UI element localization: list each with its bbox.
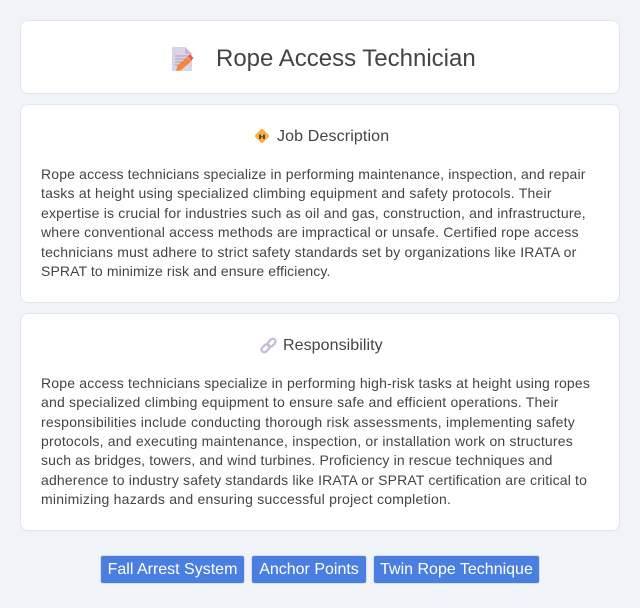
panel: responsibility	[20, 313, 620, 531]
text: job description: Rope access technicians specialize in performing maintenance, inspection, and repair	[41, 166, 586, 182]
icon: chain link	[260, 338, 277, 354]
text: responsibility: protocols, and executing maintenance, inspection, or installation work on structures	[41, 433, 573, 449]
text: job description: technicians must adhere to strict safety standards set by organizations like IRATA or	[41, 244, 576, 260]
heading: job description: Job Description	[277, 128, 389, 145]
heading: responsibility: Responsibility	[283, 337, 383, 354]
text: responsibility: responsibilities include conducting thorough risk assessments, implementing safety	[41, 414, 575, 430]
panel: job description	[20, 104, 620, 303]
text: responsibility: minimizing hazards and ensuring successful project completion.	[41, 491, 451, 507]
tag: twin rope technique	[373, 555, 540, 584]
text: job description: tasks at height using specialized climbing equipment and safety protocols. Their	[41, 185, 552, 201]
icon: document with pencil	[172, 47, 194, 71]
tag: fall arrest system	[100, 555, 245, 584]
text: responsibility: Rope access technicians specialize in performing high-risk tasks at height using ropes	[41, 375, 590, 391]
panel: title card	[20, 20, 620, 94]
text: responsibility: adherence to industry safety standards like IRATA or SPRAT certification are critical to	[41, 472, 587, 488]
text: job description: expertise is crucial for industries such as oil and gas, construction, and infrastructure,	[41, 205, 586, 221]
icon: construction diamond	[255, 128, 269, 144]
tag: anchor points: Anchor Points	[259, 561, 359, 578]
tag: twin rope technique: Twin Rope Technique	[380, 561, 533, 578]
text: job description: where conventional access methods are impractical or unsafe. Certified rope access	[41, 224, 579, 240]
title: Rope Access Technician	[216, 45, 476, 72]
text: responsibility: such as bridges, towers, and wind turbines. Proficiency in rescue techniques and	[41, 452, 553, 468]
tag: anchor points	[251, 555, 367, 584]
text: job description	[41, 166, 586, 279]
tag: fall arrest system: Fall Arrest System	[108, 561, 237, 578]
text: job description: SPRAT to minimize risk and ensure efficiency.	[41, 263, 330, 279]
text: responsibility: and specialized climbing equipment to ensure safe and efficient operations. Their	[41, 394, 559, 410]
